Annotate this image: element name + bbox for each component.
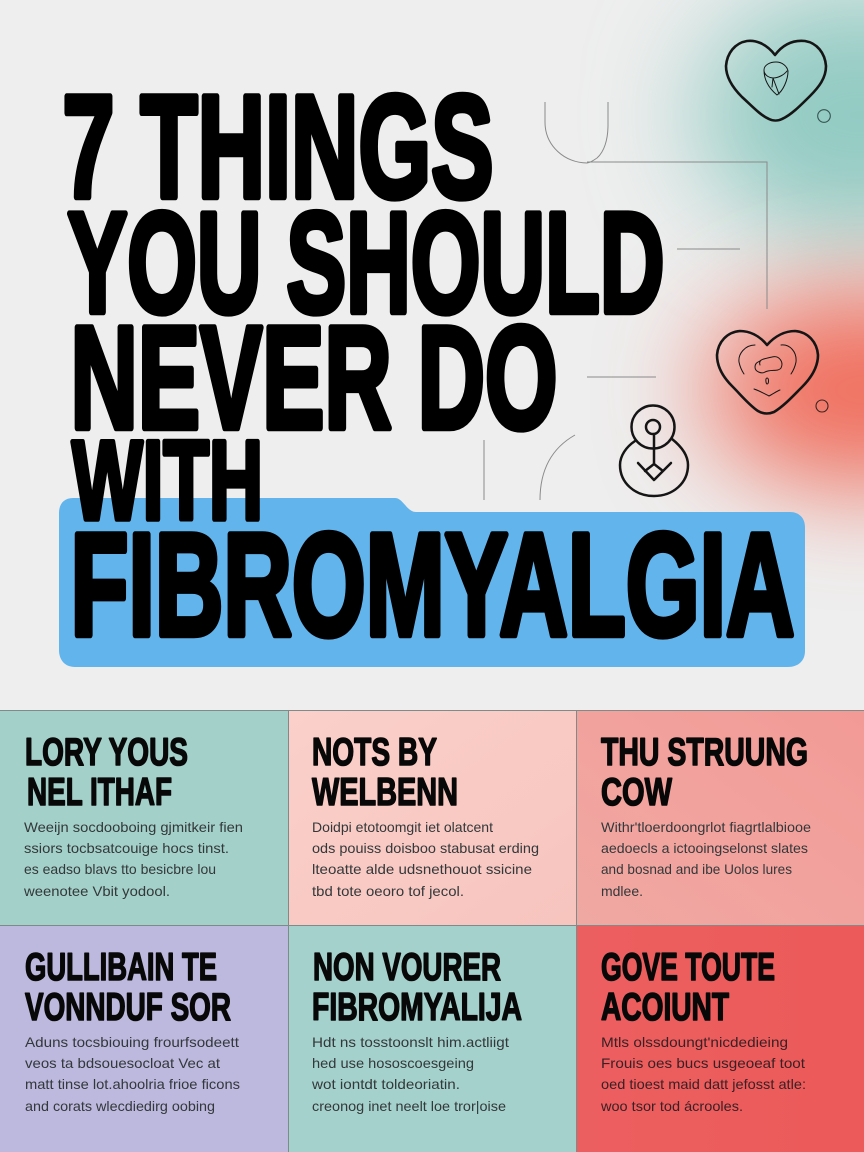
card 5 text: Hdt ns tosstoonslt him.actliigt <box>312 1034 509 1050</box>
card 2 text: Doidpi etotoomgit iet olatcent <box>312 819 493 835</box>
icon: red heart <box>717 331 818 413</box>
panel: card 4 <box>0 925 288 1152</box>
title <box>62 65 794 666</box>
card 3 text <box>601 819 811 899</box>
card 4 text: veos ta bdsouesocloat Vec at <box>25 1055 220 1071</box>
card 5 text: wot iontdt toldeoriatin. <box>311 1076 460 1092</box>
card 1 text: ssiors tocbsatcouige hocs tinst. <box>24 840 229 856</box>
card 4 text: Aduns tocsbiouing frourfsodeett <box>25 1034 239 1050</box>
card 5 heading <box>312 946 522 1029</box>
title highlight: blue box <box>59 498 805 667</box>
card 2 text <box>312 819 539 899</box>
icon: small red circle <box>816 400 828 412</box>
card 3 heading: COW <box>601 771 672 814</box>
panel: card 2 <box>288 710 576 925</box>
card 3 heading <box>601 731 808 814</box>
card 5 heading: NON VOURER <box>313 946 501 989</box>
panel: card 6 <box>576 925 864 1152</box>
card 4 text <box>25 1034 240 1114</box>
card 5 heading: FIBROMYALIJA <box>312 986 522 1029</box>
card 5 text: creonog inet neelt loe tror|oise <box>312 1098 506 1114</box>
card 1 text: es eadso blavs tto besicbre lou <box>24 861 216 877</box>
card 1 text <box>23 819 243 899</box>
card 3 text: and bosnad and ibe Uolos lures <box>601 861 792 877</box>
card 6 heading <box>601 946 775 1029</box>
card 4 text: and corats wlecdiedirg oobing <box>25 1098 215 1114</box>
icon: small teal circle <box>818 110 830 122</box>
card 6 text: oed tioest maid datt jefosst atle: <box>601 1076 806 1092</box>
card 2 heading <box>312 731 458 814</box>
card 4 heading <box>25 946 231 1029</box>
panel: card 3 <box>576 710 864 925</box>
card 4 heading: VONNDUF SOR <box>25 986 231 1029</box>
card 5 text: hed use hososcoesgeing <box>312 1055 474 1071</box>
card 6 heading: ACOIUNT <box>601 986 729 1029</box>
icon: teal heart <box>726 41 826 120</box>
title: NEVER DO <box>70 296 558 459</box>
card 6 heading: GOVE TOUTE <box>601 946 775 989</box>
card 2 heading: NOTS BY <box>312 731 437 774</box>
card 1 text: weenotee Vbit yodool. <box>23 883 170 899</box>
card 1 heading: NEL ITHAF <box>27 771 172 814</box>
panel: card 1 <box>0 710 288 925</box>
card 6 text: Mtls olssdoungt'nicdedieing <box>601 1034 788 1050</box>
card 6 text <box>600 1034 806 1114</box>
card 3 text: aedoecls a ictooingselonst slates <box>601 840 808 856</box>
background glows: teal and red <box>695 0 864 490</box>
card 6 text: woo tsor tod ácrooles. <box>600 1098 743 1114</box>
card 1 heading <box>25 731 188 814</box>
card 2 heading: WELBENN <box>312 771 458 814</box>
card 4 text: matt tinse lot.ahoolria frioe ficons <box>25 1076 240 1092</box>
panel: card 5 <box>288 925 576 1152</box>
title: 7 THINGS <box>62 65 493 228</box>
title: WITH <box>72 418 263 543</box>
card 1 heading: LORY YOUS <box>25 731 188 774</box>
card 2 text: ods pouiss doisboo stabusat erding <box>312 840 539 856</box>
thin connector lines <box>484 102 767 500</box>
card 5 text <box>311 1034 509 1114</box>
card 3 text: mdlee. <box>601 883 643 899</box>
card 1 text: Weeijn socdooboing gjmitkeir fien <box>24 819 243 835</box>
card 2 text: lteoatte alde udsnethouot ssicine <box>312 861 532 877</box>
card 3 text: Withr'tloerdoongrlot fiagrtlalbiooe <box>601 819 811 835</box>
card 2 text: tbd tote oeoro tof jecol. <box>312 883 464 899</box>
card 6 text: Frouis oes bucs usgeoeaf toot <box>601 1055 805 1071</box>
icon: figure in circles <box>620 406 688 496</box>
card 4 heading: GULLIBAIN TE <box>25 946 217 989</box>
